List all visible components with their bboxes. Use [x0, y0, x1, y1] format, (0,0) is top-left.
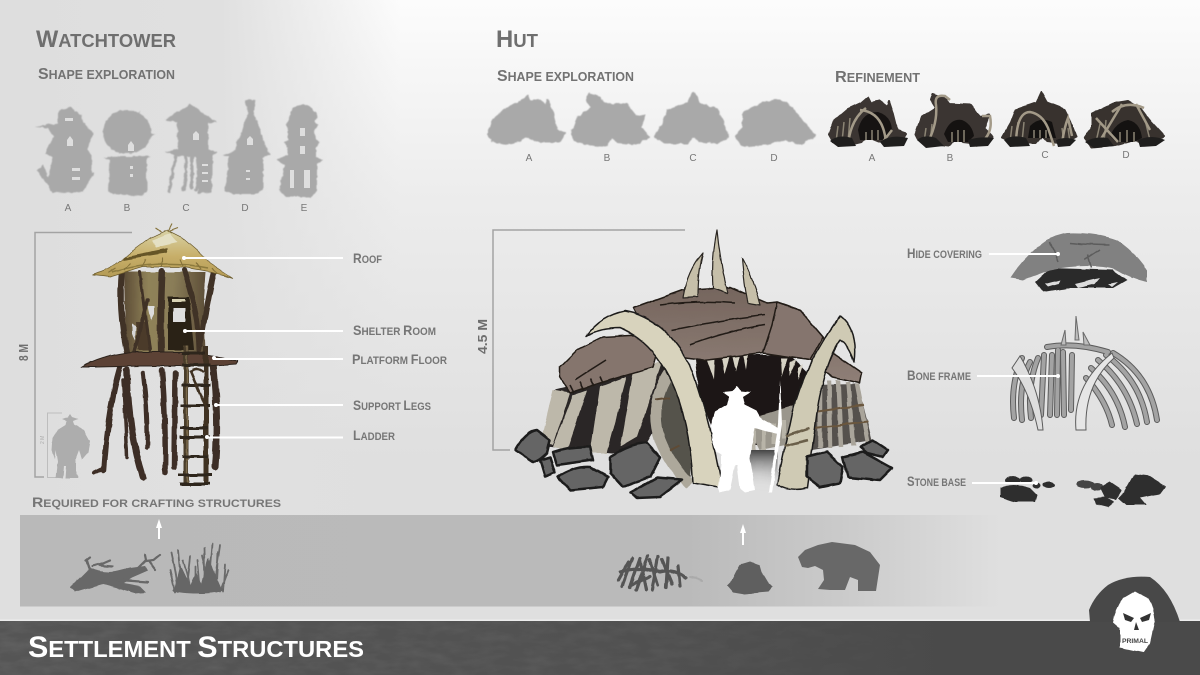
- label: stone base: STONE BASE: [907, 473, 966, 489]
- label B: B: [947, 153, 954, 164]
- ladder: [178, 346, 212, 484]
- silhouette B: [103, 110, 155, 214]
- height bracket: 8 m: [16, 232, 132, 477]
- mouth interior: [695, 355, 815, 445]
- label D: D: [1122, 150, 1130, 161]
- watchtower illustration: [82, 224, 238, 484]
- refined B: [916, 94, 994, 164]
- base stones: [515, 430, 892, 498]
- heading: required for crafting: REQUIRED FOR CRAFTING STRUCTURES: [32, 494, 281, 510]
- label C: C: [1041, 150, 1049, 161]
- callout: platform floor: [212, 351, 447, 367]
- label: shelter room: SHELTER ROOM: [353, 322, 436, 338]
- horns: [683, 230, 760, 305]
- label D: D: [241, 203, 249, 214]
- icon: twig bundle: [618, 556, 702, 590]
- silhouette C: [165, 104, 218, 214]
- label B: B: [124, 203, 131, 214]
- watchtower silhouettes A to E: [35, 99, 323, 214]
- heading: watchtower shape exploration: SHAPE EXPLORATION: [38, 66, 175, 83]
- footer title: SETTLEMENT STRUCTURES: [28, 631, 364, 664]
- icon: bear: [798, 542, 880, 591]
- exploded parts and callouts: [907, 233, 1166, 507]
- label: bone frame: BONE FRAME: [907, 367, 971, 383]
- human scale figure: [40, 413, 90, 478]
- right tusk: [777, 316, 855, 489]
- silhouette D: [736, 100, 815, 164]
- leader: stone base: [972, 481, 1038, 485]
- heading: refinement: REFINEMENT: [835, 69, 920, 86]
- hide covering: [633, 287, 862, 383]
- refined D: [1085, 101, 1165, 161]
- part: bone frame: [907, 316, 1157, 430]
- roof: [92, 230, 233, 278]
- room: [124, 272, 206, 352]
- label: hide covering: HIDE COVERING: [907, 245, 982, 261]
- logo wordmark: PRIMAL: [1122, 638, 1148, 645]
- leader: hide covering: [989, 252, 1060, 256]
- panel: crafting materials band: [20, 515, 1000, 606]
- label: roof: ROOF: [353, 250, 382, 266]
- label C: C: [689, 153, 697, 164]
- hut silhouettes A to D: [488, 92, 815, 164]
- label: 2 m: 2 M: [40, 436, 46, 444]
- callout: shelter room: [183, 322, 436, 338]
- hut main illustration: [515, 230, 892, 498]
- right back ribs: [812, 380, 872, 450]
- icon: reeds: [170, 544, 228, 594]
- part: stone base: [907, 473, 1166, 507]
- label E: E: [301, 203, 308, 214]
- refined A: [829, 97, 908, 164]
- leader: bone frame: [977, 374, 1060, 378]
- label A: A: [65, 203, 72, 214]
- refined C: [1003, 92, 1076, 161]
- callout: support legs: [214, 397, 431, 413]
- label: ladder: LADDER: [353, 427, 395, 443]
- callout: ladder: [205, 427, 395, 443]
- logo: skull emblem: [1089, 577, 1180, 653]
- doorway glow: [750, 450, 778, 490]
- label: support legs: SUPPORT LEGS: [353, 397, 431, 413]
- silhouette C: [655, 92, 728, 164]
- heading: hut shape exploration: SHAPE EXPLORATION: [497, 68, 634, 85]
- legs: [94, 363, 217, 477]
- label B: B: [604, 153, 611, 164]
- silhouette A: [35, 107, 94, 214]
- label D: D: [770, 153, 778, 164]
- platform: [82, 352, 238, 367]
- heading: hut: HUT: [496, 26, 539, 53]
- label: platform floor: PLATFORM FLOOR: [352, 351, 447, 367]
- callout: roof: [182, 250, 382, 266]
- label C: C: [182, 203, 190, 214]
- silhouette B: [572, 94, 649, 164]
- icon: stone pile: [727, 562, 773, 594]
- height bracket: 4.5 m: [475, 230, 685, 450]
- panel: watchtower: [16, 26, 447, 484]
- heading: watchtower: WATCHTOWER: [36, 26, 176, 53]
- left ribs: [540, 360, 695, 484]
- refined hut thumbnails A to D: [829, 92, 1165, 164]
- arrow: watchtower materials: [156, 519, 162, 539]
- silhouette A: [488, 96, 565, 164]
- icon: fallen trunk: [70, 555, 160, 593]
- silhouette E: [277, 104, 323, 214]
- label A: A: [869, 153, 876, 164]
- silhouette D: [222, 99, 270, 214]
- label: 4.5 m: 4.5 M: [475, 319, 490, 354]
- footer bar: [0, 620, 1200, 675]
- part: hide covering: [907, 233, 1147, 292]
- left tusk: [586, 311, 722, 488]
- arrow: hut materials: [740, 524, 746, 545]
- teeth: [707, 354, 803, 380]
- callouts: watchtower parts: [182, 250, 447, 443]
- label A: A: [526, 153, 533, 164]
- scale figure: white silhouette: [711, 380, 782, 493]
- label: 8 m: 8 M: [16, 344, 31, 361]
